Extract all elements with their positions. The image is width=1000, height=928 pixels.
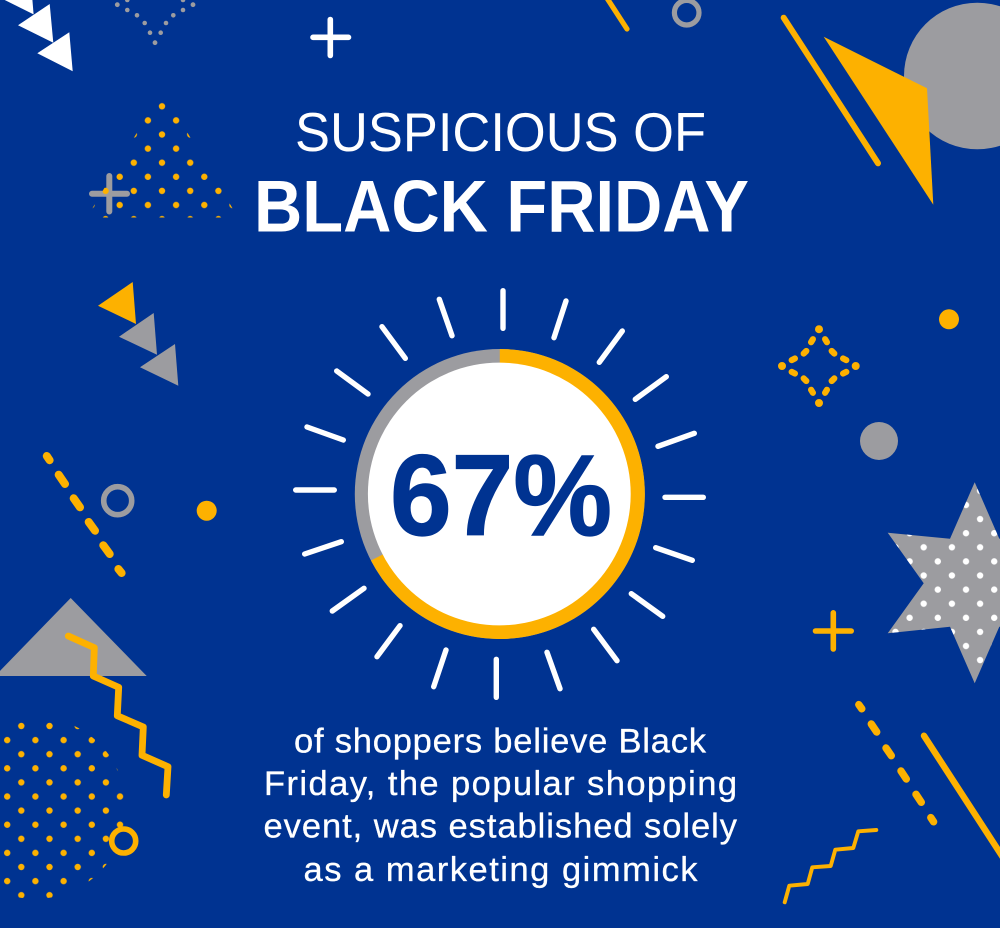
heading: black friday: BLACK FRIDAY xyxy=(254,164,749,247)
icon: grey ring top xyxy=(674,0,699,25)
icon: orange zigzag lower right xyxy=(785,830,876,902)
title xyxy=(254,101,749,247)
statistic: 67%: 67% xyxy=(390,432,612,560)
icon: grey ring left xyxy=(104,487,132,515)
icon: orange dashed line left xyxy=(47,456,122,573)
icon: grey dotted diamond top xyxy=(115,0,195,45)
icon: grey triangle lower left xyxy=(0,598,147,676)
icon: orange dashed line lower right xyxy=(859,705,934,822)
icon: orange long diagonal line lower right xyxy=(924,736,1000,859)
icon: grey dot right xyxy=(860,422,898,460)
donut chart: 67 percent xyxy=(355,349,645,639)
icon: white plus top xyxy=(313,20,348,56)
line 2: Friday, the popular shopping xyxy=(264,765,737,803)
heading: suspicious of: SUSPICIOUS OF xyxy=(295,101,706,163)
line 4: as a marketing gimmick xyxy=(304,851,698,889)
icon: grey plus xyxy=(92,176,127,212)
icon: dotted triangle xyxy=(87,90,238,218)
icon: grey circle and orange triangle top right xyxy=(824,3,1000,205)
icon: orange ring lower left xyxy=(112,829,136,853)
icon: dotted circle lower left xyxy=(0,717,126,899)
icon: orange zigzag lower left xyxy=(68,636,168,795)
icon: white triangles top left xyxy=(0,0,73,71)
line 1: of shoppers believe Black xyxy=(294,722,707,760)
description text xyxy=(264,722,738,889)
icon: orange diagonal line top right xyxy=(784,18,878,163)
icon: orange line top xyxy=(603,0,627,29)
icon: orange dotted diamond right xyxy=(782,329,856,403)
sun rays xyxy=(296,291,703,697)
icon: stepped triangles left xyxy=(98,282,178,386)
icon: orange dot left xyxy=(197,501,217,521)
line 3: event, was established solely xyxy=(264,808,738,846)
icon: orange plus right xyxy=(816,613,851,649)
icon: orange dot right xyxy=(939,309,959,329)
icon: dotted grey star xyxy=(888,482,1000,683)
